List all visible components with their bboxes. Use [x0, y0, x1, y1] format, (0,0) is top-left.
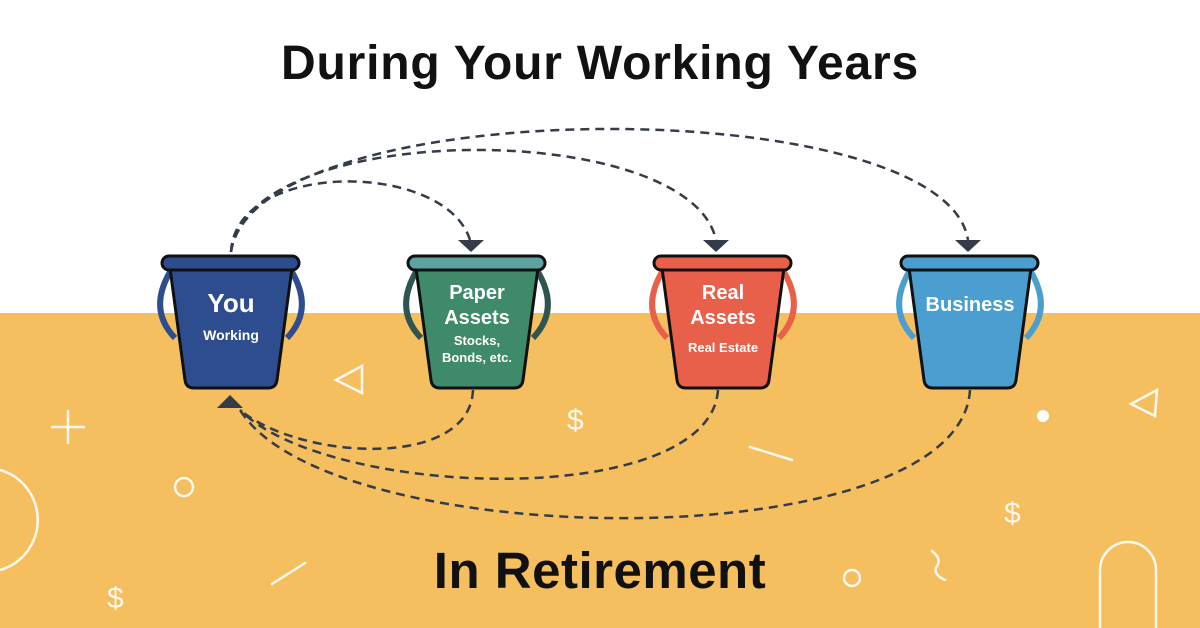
- bucket: You: Working: [203, 327, 259, 343]
- decorations: [0, 366, 1157, 628]
- arrowheads: [217, 240, 981, 408]
- bucket: Real Assets: Real Estate: [688, 340, 758, 355]
- bucket: Paper Assets: Stocks,: [454, 333, 500, 348]
- bucket: Paper Assets: Assets: [444, 307, 510, 329]
- bucket: Real Assets: [652, 256, 794, 388]
- bucket: Real Assets: Assets: [690, 307, 756, 329]
- arrows: working years (dashed): [231, 129, 970, 518]
- bucket: Business: [899, 256, 1041, 388]
- bucket: Paper Assets: Bonds, etc.: [442, 350, 512, 365]
- text: $: [1004, 497, 1021, 530]
- bucket: You: You: [207, 288, 255, 318]
- text: $: [107, 582, 124, 615]
- bucket: You: [160, 256, 302, 388]
- bucket: Paper Assets: Paper: [449, 282, 505, 304]
- text: $: [567, 404, 584, 437]
- heading: In Retirement: In Retirement: [434, 542, 766, 599]
- title: During Your Working Years: [281, 37, 919, 90]
- background: ground: [0, 313, 1200, 628]
- bucket: Paper Assets: [406, 256, 548, 388]
- bucket: Real Assets: Real: [702, 282, 744, 304]
- bucket: Business: Business: [926, 294, 1014, 316]
